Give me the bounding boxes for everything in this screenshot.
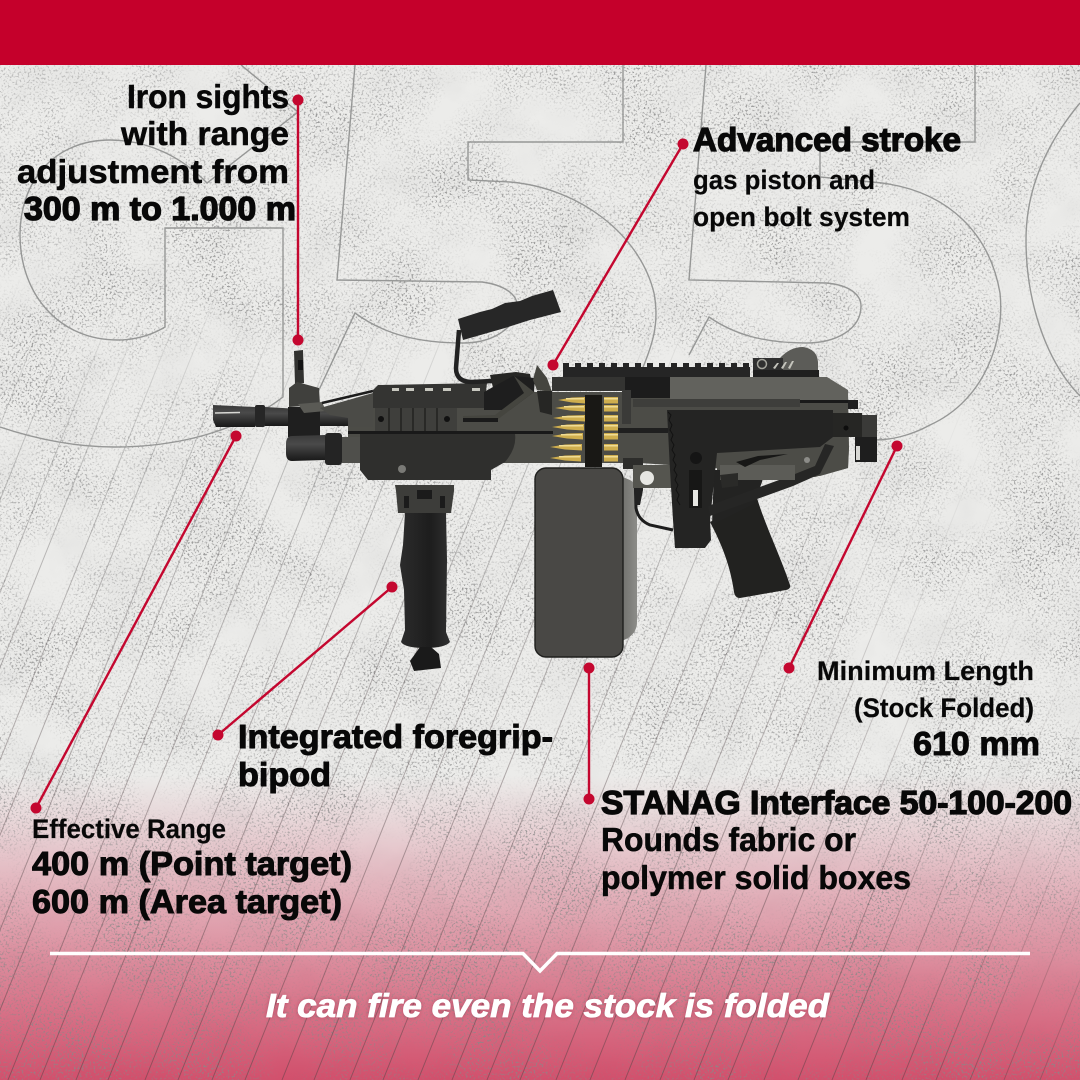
rear sight [753,347,819,377]
text: advanced stroke: Advanced stroke [693,121,961,158]
callout: STANAG leader [584,662,594,804]
upper handguard [373,383,487,408]
text: effective range [32,814,352,920]
feed cover and top rail [533,365,750,415]
receiver cover wedge [463,376,535,422]
stock strut [708,444,834,516]
text: advanced stroke: gas piston and [693,165,875,195]
letter 0 outline [1026,103,1080,396]
stock window parts [720,465,795,480]
second 5 outline [689,65,1001,440]
first 5 outline [318,65,656,392]
tagline: It can fire even the stock is folded [266,987,830,1024]
gas tube [320,391,373,427]
divider with chevron [50,954,1030,971]
text: advanced stroke: open bolt system [693,202,910,232]
foregrip mount [395,485,454,513]
callout: minimum length leader [784,440,902,674]
header bar [0,0,1080,65]
text: integrated foregrip: bipod [238,756,331,793]
handguard pin [398,465,406,473]
tagline: It can fire even the stock is folded [266,987,830,1024]
front sight [289,350,326,413]
text: minimum length: Minimum Length [817,656,1034,686]
callout: foregrip leader [212,582,398,740]
text: effective range: 600 m (Area target) [32,883,342,920]
foregrip handle [400,513,450,648]
rod above stock [622,390,858,424]
body panel under stock [717,447,849,476]
text: minimum length: 610 mm [913,725,1040,762]
text: STANAG interface [601,784,1072,896]
grey receiver top [670,377,848,400]
text: minimum length [817,656,1040,762]
picatinny side rail [375,408,457,432]
ammo box front [535,468,623,657]
machine gun illustration [213,290,877,671]
text: iron sights: with range [120,115,289,152]
lower handguard [360,434,515,480]
central receiver body [348,392,849,477]
text: effective range: 400 m (Point target) [32,845,352,882]
text: STANAG interface: Rounds fabric or [601,821,856,858]
foregrip foot [410,647,441,671]
text: STANAG interface: STANAG Interface 50-100-200 [601,784,1072,821]
ghost outline lettering [0,65,1080,447]
text: iron sights: 300 m to 1.000 m [24,190,296,227]
folded stock [667,410,834,548]
dark stripe along body [348,431,553,434]
callout: advanced stroke leader [548,138,688,370]
trigger group [623,458,673,530]
pistol grip [710,498,790,598]
diagonal line texture [0,270,1080,1080]
letter G outline [0,65,298,447]
text: effective range: Effective Range [32,814,226,844]
ammunition belt [550,395,618,467]
text: integrated foregrip [238,718,553,793]
flash hider [213,405,255,427]
foregrip bipod [395,485,454,671]
callout: iron sights leader [292,94,304,346]
text: integrated foregrip: Integrated foregrip- [238,718,553,755]
red gradient at bottom of background [0,775,1080,1080]
trigger housing [712,470,765,525]
text: iron sights [17,78,296,227]
text: minimum length: (Stock Folded) [854,693,1034,723]
ammo box rear side [618,476,637,643]
stock hinge and buttplate [833,413,877,462]
text: advanced stroke [693,121,961,232]
carry handle [456,290,561,392]
callout: effective range leader [30,430,242,814]
text: STANAG interface: polymer solid boxes [601,859,911,896]
text: iron sights: Iron sights [127,78,289,115]
barrel and collar [255,405,352,437]
under-barrel cylinder [286,433,360,465]
text: iron sights: adjustment from [17,153,289,190]
